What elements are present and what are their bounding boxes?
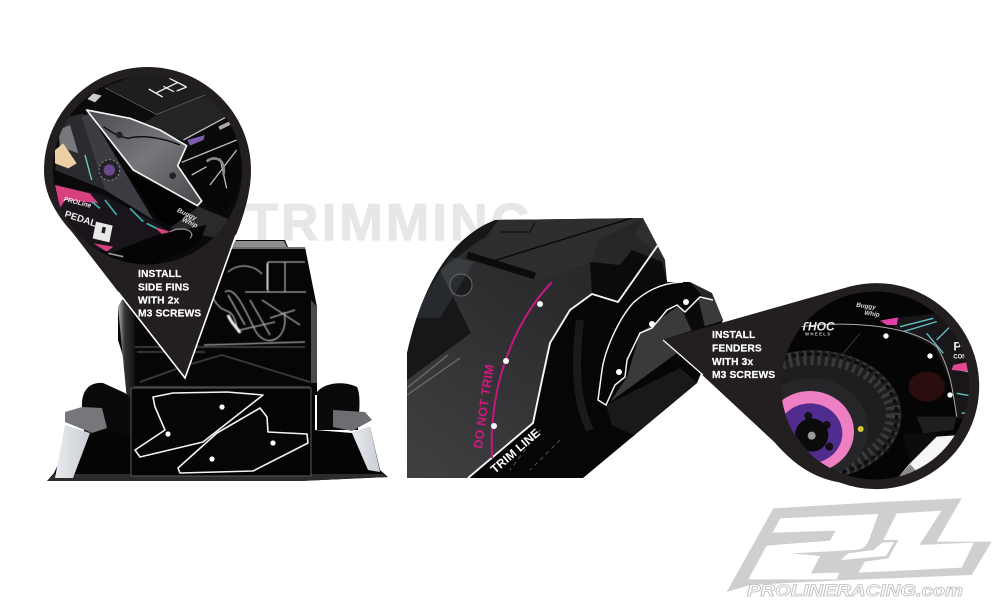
pin caption: FENDERS (712, 344, 762, 355)
trim line label: TRIM LINE (488, 426, 543, 476)
fender screw dots (883, 333, 953, 398)
pin caption: WITH 2x (138, 296, 179, 307)
logo: Pro-Line Racing (727, 498, 992, 600)
callout pin: install fenders (663, 284, 980, 489)
fin screw dots (165, 404, 276, 462)
wheel well and lower black body (468, 280, 723, 478)
car rear view with side fins (47, 240, 388, 481)
tyre (781, 350, 902, 475)
pin photo: THOC (801, 320, 835, 334)
pin white edge (663, 340, 703, 375)
pin shape (44, 67, 251, 378)
fin outline 2 (178, 408, 308, 473)
pin caption: SIDE FINS (138, 283, 189, 294)
fender close-up photo (407, 218, 723, 478)
logo URL: PROLINERACING.com (747, 581, 963, 600)
pin photo: PROLine (63, 196, 92, 210)
pin caption: INSTALL (138, 269, 181, 280)
pin caption: M3 SCREWS (712, 370, 775, 381)
pin photo: P (953, 340, 961, 354)
left wheel behind the wing (82, 383, 133, 442)
pin photo: Buggy (176, 207, 198, 222)
shadow above wheel arch (590, 250, 668, 302)
wheel rim (782, 391, 854, 468)
callout pin: install side fins (44, 67, 251, 378)
pin photo: Whip (181, 216, 199, 230)
side fin outline (87, 110, 202, 206)
heading watermark: TRIMMING: TRIMMING (246, 194, 534, 252)
pin white edges (118, 235, 236, 378)
faint web watermark (417, 257, 474, 318)
screw dots (491, 299, 689, 429)
pin photo: PEDAL (63, 209, 98, 230)
window and roof shading (407, 218, 540, 380)
do not trim line (492, 282, 552, 458)
pin caption: M3 SCREWS (138, 309, 201, 320)
pin caption: INSTALL (712, 330, 755, 341)
engine bay detail (134, 262, 310, 390)
rear wing base (47, 388, 388, 481)
fender outline (598, 282, 713, 405)
side plates (65, 407, 107, 433)
fin outline 1 (135, 392, 263, 457)
side fins (55, 425, 90, 478)
car upper body (118, 240, 317, 395)
pin caption: WITH 3x (712, 357, 753, 368)
do not trim label: DO NOT TRIM (471, 363, 497, 449)
logo mark (727, 498, 992, 592)
pin photo: CON (953, 355, 967, 361)
pin photo: Buggy (856, 302, 877, 311)
pin photo: WHEELS (805, 331, 832, 336)
pin shape (663, 284, 979, 489)
right wheel behind the wing (317, 383, 360, 430)
trim line (468, 245, 658, 478)
pin photo (50, 75, 250, 267)
pin photo (781, 292, 969, 480)
pin photo: Whip (864, 310, 880, 319)
fender face (610, 298, 725, 402)
